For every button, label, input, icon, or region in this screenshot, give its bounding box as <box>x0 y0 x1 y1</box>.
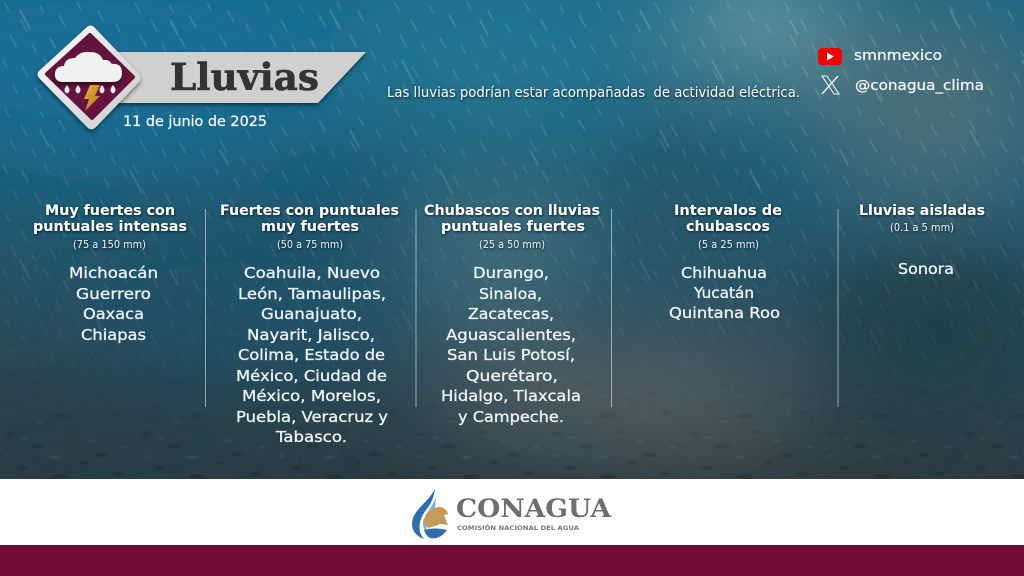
states: Aguascalientes, <box>446 326 576 344</box>
youtube handle: smnmexico <box>854 48 942 64</box>
heading <box>424 203 600 235</box>
heading: Chubascos con lluvias <box>424 203 600 219</box>
states <box>441 264 581 426</box>
heading <box>220 203 399 235</box>
states: Yucatán <box>693 284 754 302</box>
heading: Muy fuertes con <box>45 203 175 219</box>
heading: Lluvias aisladas <box>859 203 985 219</box>
maroon footer bar <box>0 545 1024 576</box>
column dividers <box>206 209 838 407</box>
heading: chubascos <box>686 219 770 235</box>
icon: water and eagle emblem <box>412 489 448 539</box>
icon: X <box>822 76 839 94</box>
x handle: @conagua_clima <box>855 78 984 94</box>
range: (25 a 50 mm) <box>479 238 545 251</box>
panel: muy fuertes <box>33 203 187 344</box>
wordmark subtitle: COMISIÓN NACIONAL DEL AGUA <box>457 525 579 532</box>
heading: puntuales fuertes <box>441 219 585 235</box>
heading: Fuertes con puntuales <box>220 203 399 219</box>
heading: muy fuertes <box>261 219 359 235</box>
heading: puntuales intensas <box>33 219 187 235</box>
social media <box>818 48 984 94</box>
states: Sonora <box>898 260 954 278</box>
states: Durango, <box>473 264 549 282</box>
states: Oaxaca <box>83 305 144 323</box>
states <box>69 264 158 344</box>
date: 11 de junio de 2025 <box>123 114 267 130</box>
logo: CONAGUA <box>412 489 612 539</box>
states: México, Ciudad de <box>236 367 387 385</box>
panel: lluvias aisladas <box>859 203 985 278</box>
states: Coahuila, Nuevo <box>244 264 380 282</box>
wordmark: CONAGUA <box>456 494 612 523</box>
states: Hidalgo, Tlaxcala <box>441 387 581 405</box>
icon: youtube <box>818 48 842 65</box>
heading: Intervalos de <box>674 203 782 219</box>
states <box>669 264 780 322</box>
range: (50 a 75 mm) <box>277 238 343 251</box>
states: León, Tamaulipas, <box>238 285 386 303</box>
states: Sinaloa, <box>479 285 542 303</box>
title ribbon <box>110 52 366 103</box>
panel: intervalos de chubascos <box>669 203 782 322</box>
states: Guanajuato, <box>261 305 362 323</box>
states: Colima, Estado de <box>238 346 385 364</box>
range: (75 a 150 mm) <box>73 238 146 251</box>
panel: chubascos con lluvias <box>424 203 600 426</box>
states <box>236 264 388 446</box>
range: (5 a 25 mm) <box>698 238 759 251</box>
states: y Campeche. <box>458 408 564 426</box>
states: Querétaro, <box>466 367 558 385</box>
states: Tabasco. <box>275 428 347 446</box>
states: Michoacán <box>69 264 158 282</box>
states: Guerrero <box>76 285 151 303</box>
white footer band <box>0 479 1024 546</box>
states: México, Morelos, <box>242 387 381 405</box>
electrical activity note: Las lluvias podrían estar acompañadas de actividad eléctrica. <box>387 85 800 101</box>
icon: rain cloud with lightning diamond <box>38 26 140 129</box>
range: (0.1 a 5 mm) <box>890 221 954 234</box>
states: Zacatecas, <box>468 305 554 323</box>
states: Puebla, Veracruz y <box>236 408 388 426</box>
states: San Luis Potosí, <box>447 346 575 364</box>
states: Nayarit, Jalisco, <box>247 326 375 344</box>
states: Chihuahua <box>681 264 767 282</box>
heading <box>33 203 187 235</box>
heading <box>674 203 782 235</box>
title badge <box>38 26 366 129</box>
panel: fuertes <box>220 203 399 446</box>
states: Quintana Roo <box>669 304 780 322</box>
title text: Lluvias <box>170 55 319 99</box>
states: Chiapas <box>81 326 146 344</box>
